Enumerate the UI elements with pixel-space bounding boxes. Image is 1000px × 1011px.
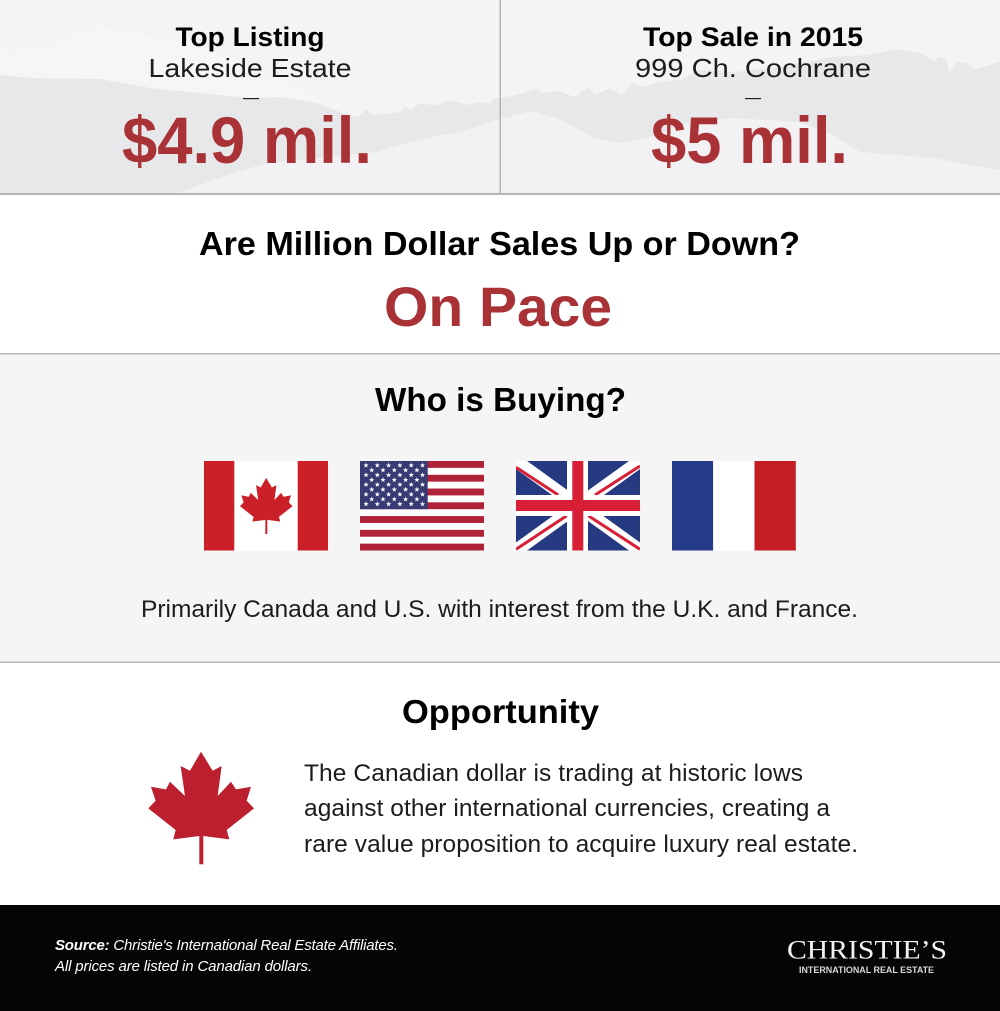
text: opportunity description	[304, 760, 858, 858]
heading: top listing: Top Listing	[176, 22, 324, 52]
logo: christie's international real estate: INTERNATIONAL REAL ESTATE	[799, 965, 934, 976]
text: buyer summary: Primarily Canada and U.S. with interest from the U.K. and France.	[141, 596, 858, 623]
panel: footer	[0, 905, 1000, 1011]
flag: canada	[204, 461, 328, 550]
panel: million dollar sales	[0, 195, 1000, 353]
icon: maple leaf	[148, 752, 254, 864]
panel: top listings with mountain backdrop	[0, 0, 1000, 195]
dash	[243, 98, 259, 99]
heading: who is buying: Who is Buying?	[375, 381, 626, 418]
text: source note	[54, 937, 398, 975]
heading: are million dollar sales up or down: Are Million Dollar Sales Up or Down?	[199, 225, 800, 262]
dash	[745, 98, 761, 99]
value: top listing price: $4.9 mil.	[122, 103, 372, 177]
flag: france	[672, 461, 796, 550]
text: opportunity description: The Canadian dollar is trading at historic lows	[304, 760, 803, 787]
panel: who is buying	[0, 353, 1000, 663]
text: source note: Source: Christie's International Real Estate Affiliates.	[55, 937, 398, 954]
heading: top sale: Top Sale in 2015	[643, 22, 863, 52]
background: mountains	[0, 26, 1000, 194]
text: address: 999 Ch. Cochrane	[635, 53, 871, 83]
text: lakeside estate: Lakeside Estate	[148, 53, 352, 83]
value: on pace: On Pace	[384, 275, 612, 338]
text: opportunity description: rare value proposition to acquire luxury real estate.	[304, 831, 858, 858]
flag: united kingdom	[516, 461, 640, 550]
flag: united states	[360, 461, 484, 550]
logo: christie's international real estate: CHRISTIE’S	[787, 936, 947, 964]
text: opportunity description: against other international currencies, creating a	[304, 795, 830, 822]
heading: opportunity: Opportunity	[402, 693, 600, 730]
panel: opportunity	[0, 663, 1000, 905]
logo: christie's international real estate	[787, 936, 947, 976]
value: top sale price: $5 mil.	[651, 103, 848, 177]
text: source note: All prices are listed in Canadian dollars.	[54, 958, 312, 975]
